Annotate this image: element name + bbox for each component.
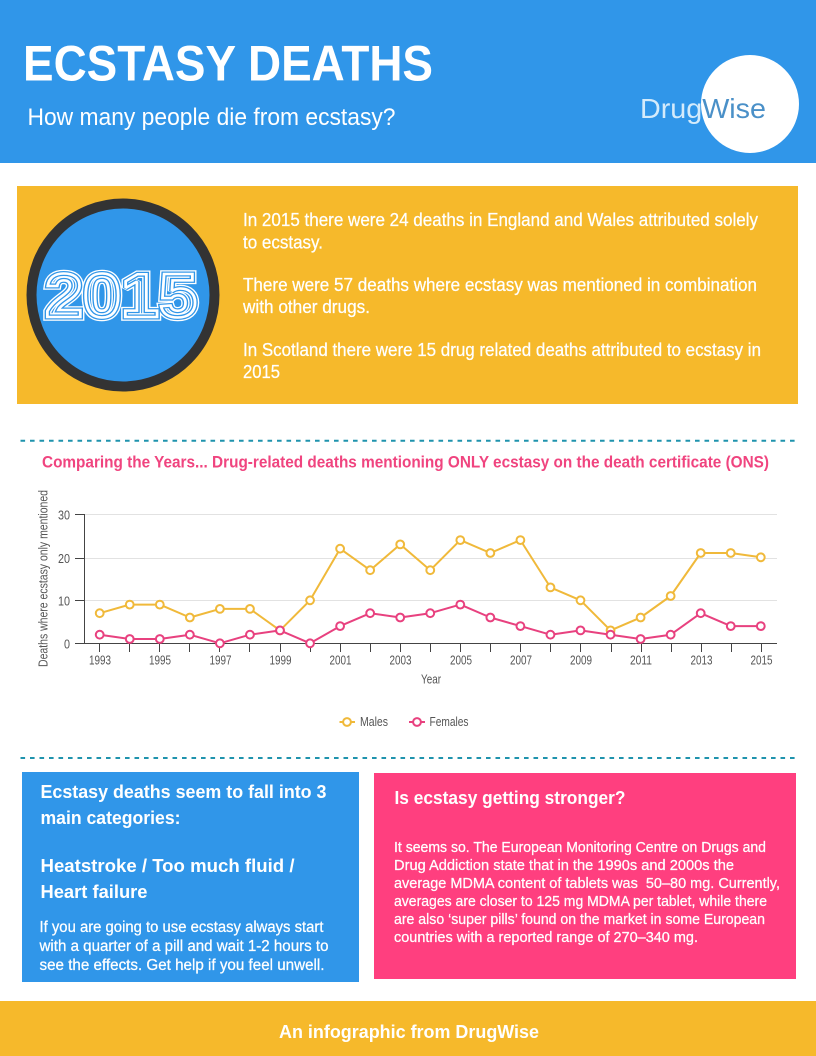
logo: DrugWise: DrugWise: [640, 93, 766, 124]
x axis labels: 1997: [210, 652, 232, 668]
icon: 2015 badge: [32, 204, 214, 386]
x axis labels: [89, 652, 772, 668]
strength heading: Is ecstasy getting stronger?: [394, 787, 626, 808]
x axis labels: 1999: [270, 652, 292, 668]
header banner: [0, 0, 816, 163]
categories heading: Heart failure: [40, 881, 148, 902]
panel: is ecstasy getting stronger: [374, 773, 796, 979]
series: males: [96, 536, 765, 634]
line chart: deaths by year: [36, 490, 777, 729]
text block: 2015 facts: 2015: [243, 362, 280, 382]
footer text: An infographic from DrugWise: [279, 1021, 539, 1042]
x axis labels: 1993: [89, 652, 111, 668]
icon: 2015 badge: 2015: [45, 262, 197, 331]
y axis title: Deaths where ecstasy only mentioned: [36, 490, 50, 667]
advice text: If you are going to use ecstasy always start: [40, 919, 324, 936]
y axis labels: 30: [58, 508, 70, 522]
subtitle: How many people die from ecstasy?: [28, 104, 396, 131]
x axis labels: 2007: [510, 652, 532, 668]
text block: 2015 facts: to ecstasy.: [243, 232, 323, 252]
x axis labels: 1995: [149, 652, 171, 668]
x axis labels: 2013: [690, 652, 712, 668]
categories heading: [40, 781, 326, 902]
legend: Males: [360, 714, 388, 729]
chart heading: Comparing the Years... Drug-related deaths mentioning ONLY ecstasy on the death certificate (ONS): [42, 453, 769, 471]
logo: DrugWise: [640, 55, 799, 153]
y axis labels: 0: [64, 636, 70, 652]
title: ECSTASY DEATHS: [23, 36, 433, 92]
strength text: [394, 840, 780, 946]
strength text: are also ‘super pills’ found on the market in some European: [394, 912, 765, 928]
y axis labels: 10: [58, 594, 70, 608]
series: females: [96, 601, 765, 647]
icon: 2015 badge: 2015: [45, 262, 197, 331]
x axis title: Year: [421, 672, 441, 686]
text block: 2015 facts: In Scotland there were 15 drug related deaths attributed to ecstasy in: [243, 340, 761, 360]
chart axes: [75, 514, 777, 652]
strength text: countries with a reported range of 270–340 mg.: [394, 930, 698, 946]
y axis labels: 20: [58, 551, 70, 566]
strength text: Drug Addiction state that in the 1990s and 2000s the: [394, 858, 734, 874]
x axis labels: 2001: [330, 652, 352, 668]
footer banner: [0, 1001, 816, 1056]
advice text: [39, 919, 329, 974]
x axis labels: 2015: [750, 652, 772, 668]
text block: 2015 facts: In 2015 there were 24 deaths in England and Wales attributed solely: [243, 210, 758, 230]
strength text: averages are closer to 125 mg MDMA per tablet, while there: [394, 894, 767, 910]
text block: 2015 facts: There were 57 deaths where ecstasy was mentioned in combination: [243, 275, 757, 295]
legend: Females: [430, 714, 469, 729]
categories heading: Ecstasy deaths seem to fall into 3: [40, 781, 326, 802]
icon: 2015 badge: 2015: [45, 262, 197, 331]
text block: 2015 facts: with other drugs.: [242, 297, 370, 317]
logo: DrugWise: DrugWise: [640, 93, 766, 124]
legend: [340, 714, 469, 729]
x axis labels: 2011: [630, 652, 652, 668]
categories heading: main categories:: [40, 807, 180, 828]
advice text: see the effects. Get help if you feel unwell.: [40, 957, 324, 974]
panel: categories of death: [22, 772, 359, 982]
text block: 2015 facts: [242, 210, 761, 382]
categories heading: Heatstroke / Too much fluid /: [40, 855, 294, 876]
strength text: average MDMA content of tablets was 50–80 mg. Currently,: [394, 876, 780, 892]
x axis labels: 2003: [390, 652, 412, 668]
y axis labels: [58, 508, 70, 652]
x axis labels: 2009: [570, 652, 592, 668]
x axis labels: 2005: [450, 652, 472, 668]
strength text: It seems so. The European Monitoring Centre on Drugs and: [394, 840, 766, 856]
advice text: with a quarter of a pill and wait 1-2 hours to: [39, 938, 329, 955]
panel: 2015 summary: [17, 186, 798, 404]
